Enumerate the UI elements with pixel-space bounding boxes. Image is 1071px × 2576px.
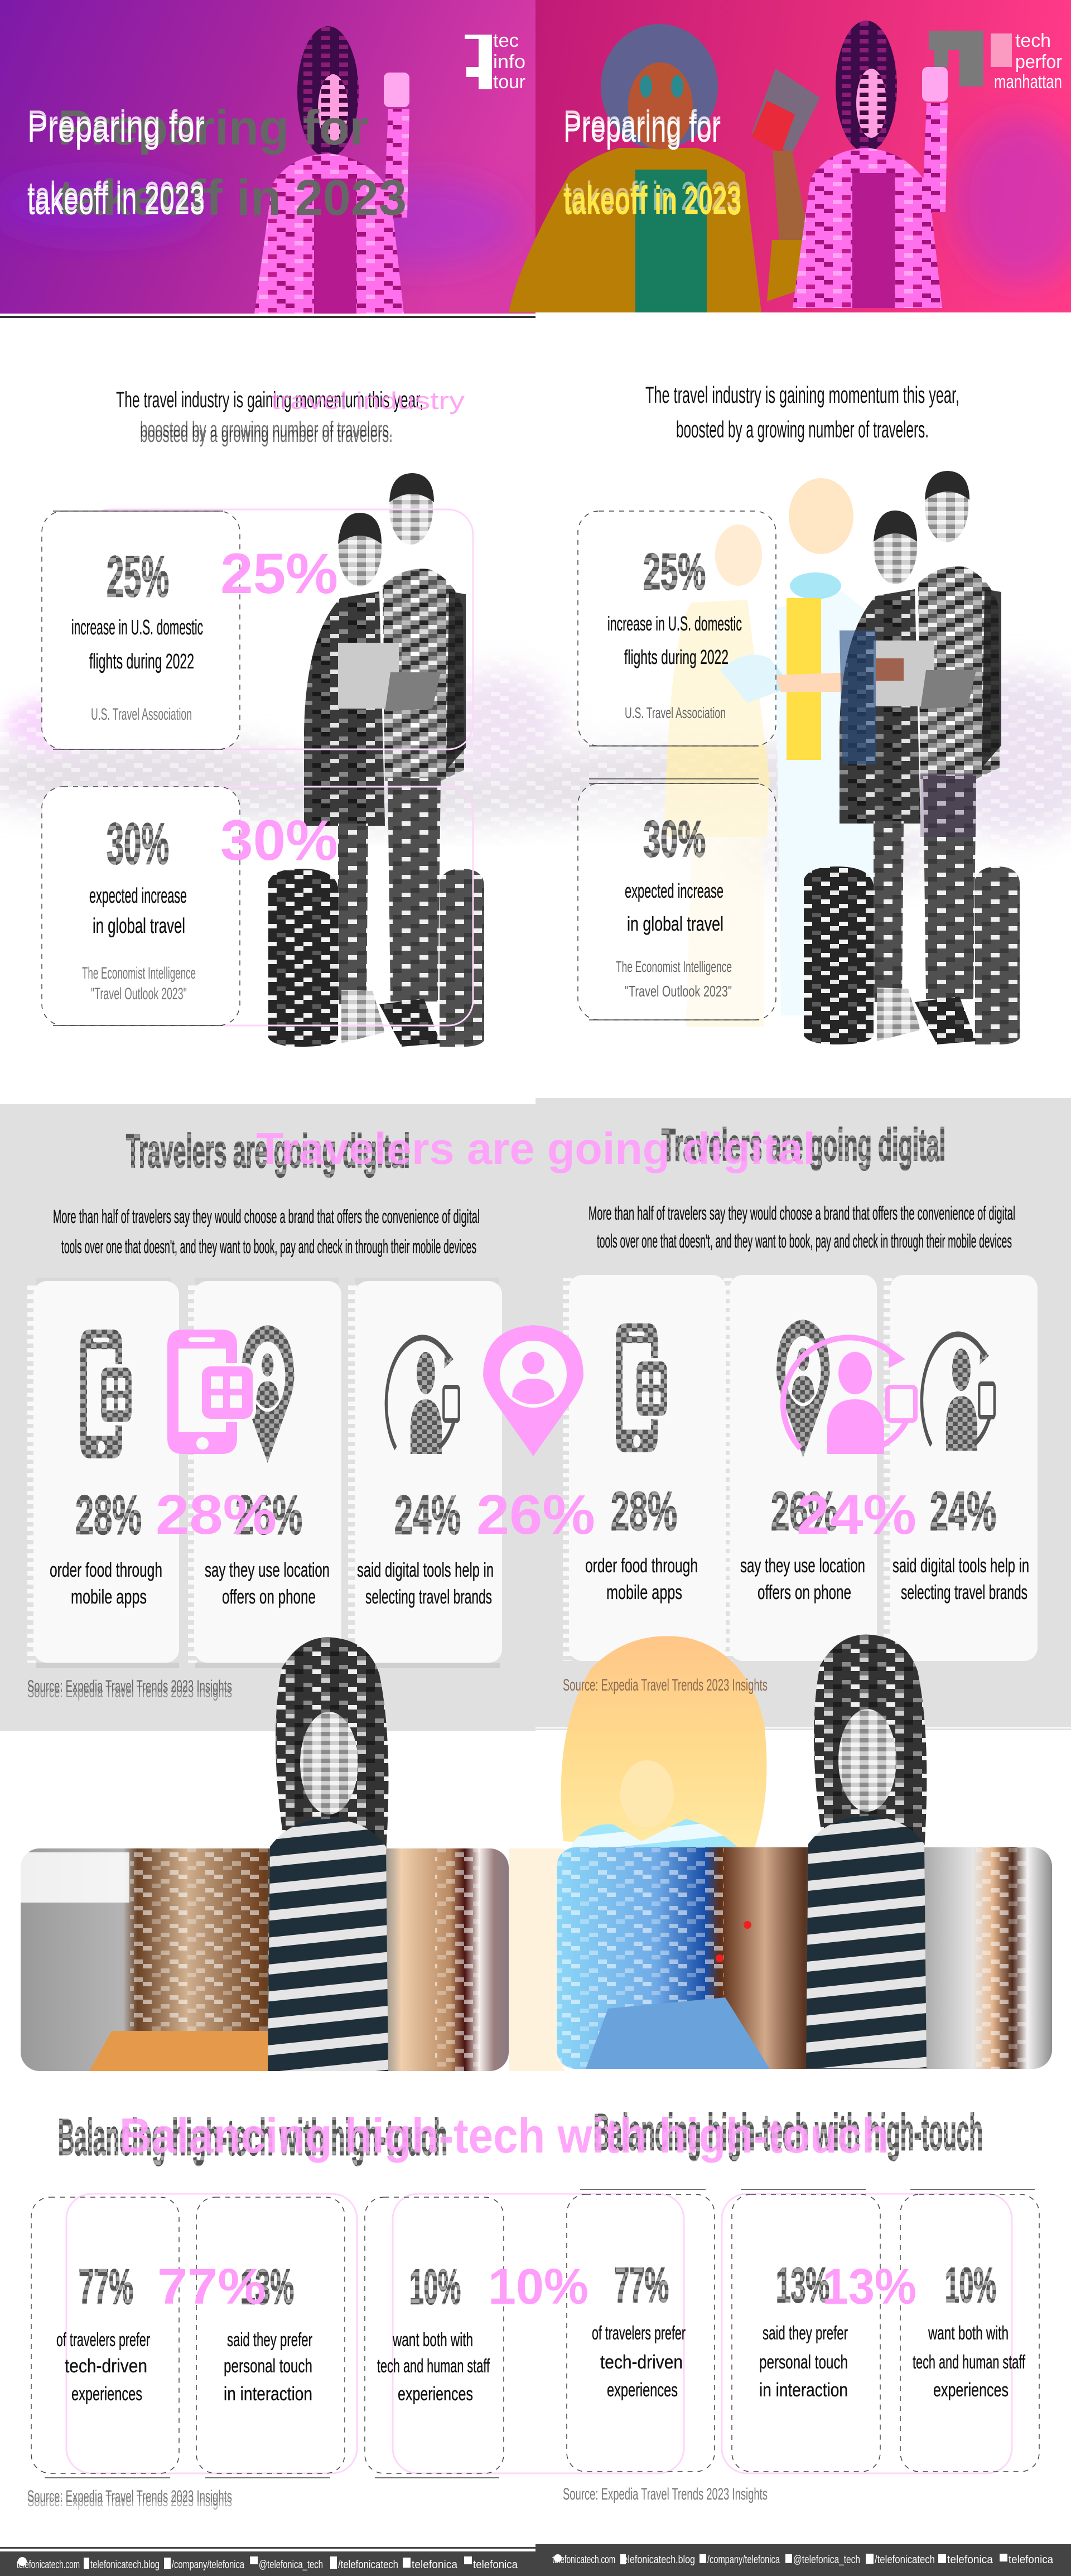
logo right: perfor [1015, 51, 1062, 73]
description: experiences [398, 2384, 473, 2405]
stat: 10% [945, 2257, 996, 2313]
source: U.S. Travel Association [625, 704, 726, 721]
stat highlight: 30% pink: 30% [220, 808, 338, 872]
photo: pale orange haired woman ghost [509, 1636, 766, 2071]
panel: intro heading right [645, 382, 959, 442]
description: say they use location [205, 1558, 330, 1581]
stat highlight: 77% pink: 77% [157, 2259, 266, 2315]
card: 25% left [42, 511, 240, 749]
description: tech and human staff [377, 2356, 490, 2377]
description: said they prefer [227, 2329, 312, 2351]
stat: 24% [930, 1480, 996, 1542]
footer links: telefonicatech.com [17, 2559, 80, 2571]
panel: hero left [0, 0, 536, 318]
card: 10% [365, 2197, 504, 2478]
card: 26% location [723, 1275, 877, 1661]
pink ghost card outlines bottom [66, 2194, 1012, 2473]
heading highlight: balancing pink: Balancing high-tech with high-touch [119, 2108, 889, 2163]
card: 10% [900, 2189, 1039, 2472]
description: flights during 2022 [89, 650, 194, 673]
photo: hero traveller [793, 21, 948, 308]
icon: map pin [241, 1325, 294, 1463]
description: experiences [71, 2384, 142, 2405]
card: 30% right [578, 779, 776, 1020]
description: in global travel [93, 914, 185, 938]
source: The Economist Intelligence [82, 964, 196, 983]
footer links: telefonica [412, 2559, 458, 2571]
source: Source: Expedia Travel Trends 2023 Insights [563, 2485, 768, 2503]
card: 13% [196, 2197, 345, 2478]
title left: takeoff in 2023 [27, 179, 205, 223]
footer right [536, 2544, 1071, 2576]
photo: illustrated traveller with coat [509, 24, 820, 312]
panel: hero right [509, 0, 1071, 312]
panel: travelers going digital left [0, 1104, 536, 1731]
photo: traveller couple left [268, 473, 484, 1047]
description [592, 2323, 686, 2401]
stat: 24% [394, 1484, 461, 1545]
stat: 77% [79, 2259, 133, 2314]
description: personal touch [759, 2352, 848, 2373]
title right: takeoff in 2023 [563, 174, 741, 219]
description: increase in U.S. domestic [607, 612, 742, 635]
card: 26% location [188, 1278, 341, 1668]
logo left: info [493, 51, 525, 73]
description: order food through [585, 1554, 698, 1577]
description: increase in U.S. domestic [71, 616, 203, 639]
source: U.S. Travel Association [91, 705, 192, 724]
title left ghost: Preparing for [58, 100, 369, 155]
icon: phone [80, 1330, 133, 1458]
source: The Economist Intelligence [616, 958, 732, 975]
footer links: @telefonica_tech [259, 2559, 323, 2571]
description: selecting travel brands [365, 1585, 492, 1608]
description: offers on phone [758, 1581, 851, 1604]
title left: Preparing for [27, 102, 205, 146]
stat highlight: 26% pink: 26% [476, 1484, 595, 1546]
source [82, 964, 196, 1003]
stat: 25% [107, 545, 169, 609]
source [616, 958, 732, 1000]
photo: traveller couple right [804, 471, 1020, 1044]
description [607, 612, 742, 668]
title left ghost [58, 100, 407, 226]
stat highlight: 25% pink: 25% [220, 542, 338, 605]
description [357, 1558, 494, 1608]
logo right [929, 30, 1062, 93]
photo: wide laptop scene left [21, 1848, 509, 2071]
card: 24% travel brands [348, 1278, 502, 1668]
footer links: @telefonica_tech [793, 2554, 860, 2566]
source: Source: Expedia Travel Trends 2023 Insights [27, 1683, 232, 1701]
footer icons [18, 2556, 472, 2569]
intro text: tools over one that doesn't, and they want to book, pay and check in through their mobile devices [61, 1236, 476, 1258]
source: Source: Expedia Travel Trends 2023 Insights [27, 2492, 232, 2510]
description: expected increase [625, 879, 723, 902]
description [56, 2329, 150, 2405]
heading highlight: travelers are going digital pink: Travelers are going digital [256, 1124, 816, 1173]
stat: 13% [240, 2259, 294, 2314]
intro text [53, 1206, 480, 1258]
card: 77% [567, 2189, 715, 2472]
description: personal touch [224, 2356, 312, 2377]
panel: intro heading left: boosted by a growing number of travelers. [140, 417, 393, 442]
description [224, 2329, 312, 2405]
logo left [465, 30, 525, 93]
description: offers on phone [222, 1585, 316, 1608]
source: Source: Expedia Travel Trends 2023 Insights [27, 1677, 232, 1696]
footer links [552, 2554, 1054, 2566]
source right: Source: Expedia Travel Trends 2023 Insights [563, 1676, 768, 1694]
highlight: travel industry: travel industry [271, 387, 465, 415]
source [27, 1677, 232, 1701]
description: of travelers prefer [56, 2329, 150, 2351]
footer icons [554, 2554, 1007, 2564]
description: experiences [933, 2380, 1009, 2401]
description [205, 1558, 330, 1608]
photo: hero traveller [254, 26, 409, 314]
title right [563, 102, 741, 223]
card: 24% travel brands [884, 1275, 1038, 1661]
description [50, 1558, 162, 1608]
stat: 25% [643, 543, 706, 600]
panel: travelers going digital left: Travelers are going digital [126, 1125, 410, 1177]
stat highlight: 24% pink: 24% [797, 1484, 916, 1546]
card: 25% right [578, 511, 776, 746]
footer links: telefonicatech.blog [90, 2559, 160, 2571]
stat: 28% [75, 1484, 142, 1545]
description [377, 2329, 490, 2405]
intro text [588, 1203, 1015, 1252]
illustration: pale couple ghost [664, 478, 876, 1027]
description: experiences [607, 2380, 678, 2401]
stat: 28% [611, 1480, 677, 1542]
logo right: tech [1015, 30, 1051, 51]
panel: balancing high tech left: Balancing high-tech with high-touch [58, 2109, 447, 2166]
card: 28% mobile apps [27, 1278, 179, 1668]
stat: 13% [776, 2257, 829, 2313]
description: said they prefer [763, 2323, 848, 2344]
icon: phone [616, 1323, 669, 1452]
description: in interaction [759, 2380, 848, 2401]
description: want both with [928, 2323, 1009, 2344]
logo left: tec [493, 30, 519, 51]
footer links: /company/telefonica [707, 2554, 780, 2566]
footer links: telefonica [473, 2559, 518, 2571]
footer left [0, 2547, 536, 2576]
panel: intro heading left: The travel industry is gaining momentum this year, [116, 388, 423, 412]
description: expected increase [89, 884, 187, 908]
stat: 30% [643, 811, 706, 868]
source: "Travel Outlook 2023" [625, 983, 732, 1000]
description: mobile apps [71, 1585, 147, 1608]
description [893, 1554, 1029, 1604]
icon: person cycle [386, 1337, 459, 1454]
description [71, 616, 203, 673]
stat: 26% [771, 1480, 838, 1542]
card: 28% mobile apps [563, 1275, 726, 1661]
icon: pink phone [167, 1330, 256, 1454]
footer links: telefonica [1009, 2554, 1054, 2566]
description: mobile apps [606, 1581, 682, 1604]
title left: Preparing for [27, 107, 205, 150]
card: 13% [732, 2189, 880, 2472]
panel: balancing high tech right [563, 2104, 1039, 2503]
panel: travelers going digital right [536, 1098, 1071, 1730]
photo: wide laptop scene right [557, 1847, 1052, 2069]
title right: Preparing for [563, 107, 721, 150]
pink ghost card outlines [85, 509, 473, 1025]
footer links: telefonica [947, 2554, 993, 2566]
icon: pink map pin [483, 1325, 583, 1456]
title right: takeoff in 2023 [563, 179, 741, 223]
footer links: /telefonicatech [875, 2554, 935, 2566]
description: tech-driven [600, 2352, 683, 2373]
description: in global travel [627, 912, 723, 935]
title left: takeoff in 2023 [27, 174, 205, 219]
description [585, 1554, 698, 1604]
stat: 77% [614, 2257, 669, 2313]
logo left: tour [493, 71, 525, 93]
footer links: telefonicatech.blog [620, 2554, 695, 2566]
icon: pink person cycle [783, 1337, 915, 1454]
stat: 30% [107, 812, 169, 877]
description: want both with [392, 2329, 473, 2351]
footer links: /company/telefonica [172, 2559, 245, 2571]
source [27, 2487, 232, 2510]
description: tech-driven [65, 2356, 147, 2377]
description: order food through [50, 1558, 162, 1581]
footer links: /telefonicatech [338, 2559, 398, 2571]
panel: intro heading left [116, 387, 465, 447]
description: of travelers prefer [592, 2323, 686, 2344]
description: in interaction [224, 2384, 312, 2405]
icon: person cycle [922, 1334, 995, 1451]
description [913, 2323, 1025, 2401]
stat highlight: 10% pink: 10% [488, 2259, 588, 2315]
title left [27, 102, 205, 223]
source: Source: Expedia Travel Trends 2023 Insights [27, 2487, 232, 2506]
source: "Travel Outlook 2023" [91, 985, 187, 1003]
description: say they use location [740, 1554, 865, 1577]
mottled cloud background [0, 558, 1071, 948]
title left ghost: takeoff in 2023 [58, 170, 407, 226]
card: 30% left [42, 787, 240, 1025]
photo: woman using phone left [268, 1638, 388, 2071]
footer links: telefonicatech.com [552, 2554, 615, 2566]
card: 77% [31, 2197, 179, 2478]
intro text: More than half of travelers say they would choose a brand that offers the convenience of digital [53, 1206, 480, 1227]
icon: map pin [776, 1320, 829, 1457]
footer links [17, 2559, 518, 2571]
description [89, 884, 187, 938]
stat: 10% [409, 2259, 461, 2314]
stat highlight: 13% pink: 13% [822, 2259, 916, 2315]
stat highlight: 28% pink: 28% [156, 1484, 277, 1546]
description [625, 879, 723, 935]
description [740, 1554, 865, 1604]
stat: 26% [235, 1484, 302, 1545]
title right: Preparing for [563, 102, 721, 146]
description: flights during 2022 [624, 646, 729, 668]
photo: woman using phone right [806, 1635, 927, 2068]
panel: intro heading left: boosted by a growing number of travelers. [140, 422, 393, 447]
description [759, 2323, 848, 2401]
panel: balancing high tech left [27, 2109, 504, 2510]
description: said digital tools help in [357, 1558, 494, 1581]
